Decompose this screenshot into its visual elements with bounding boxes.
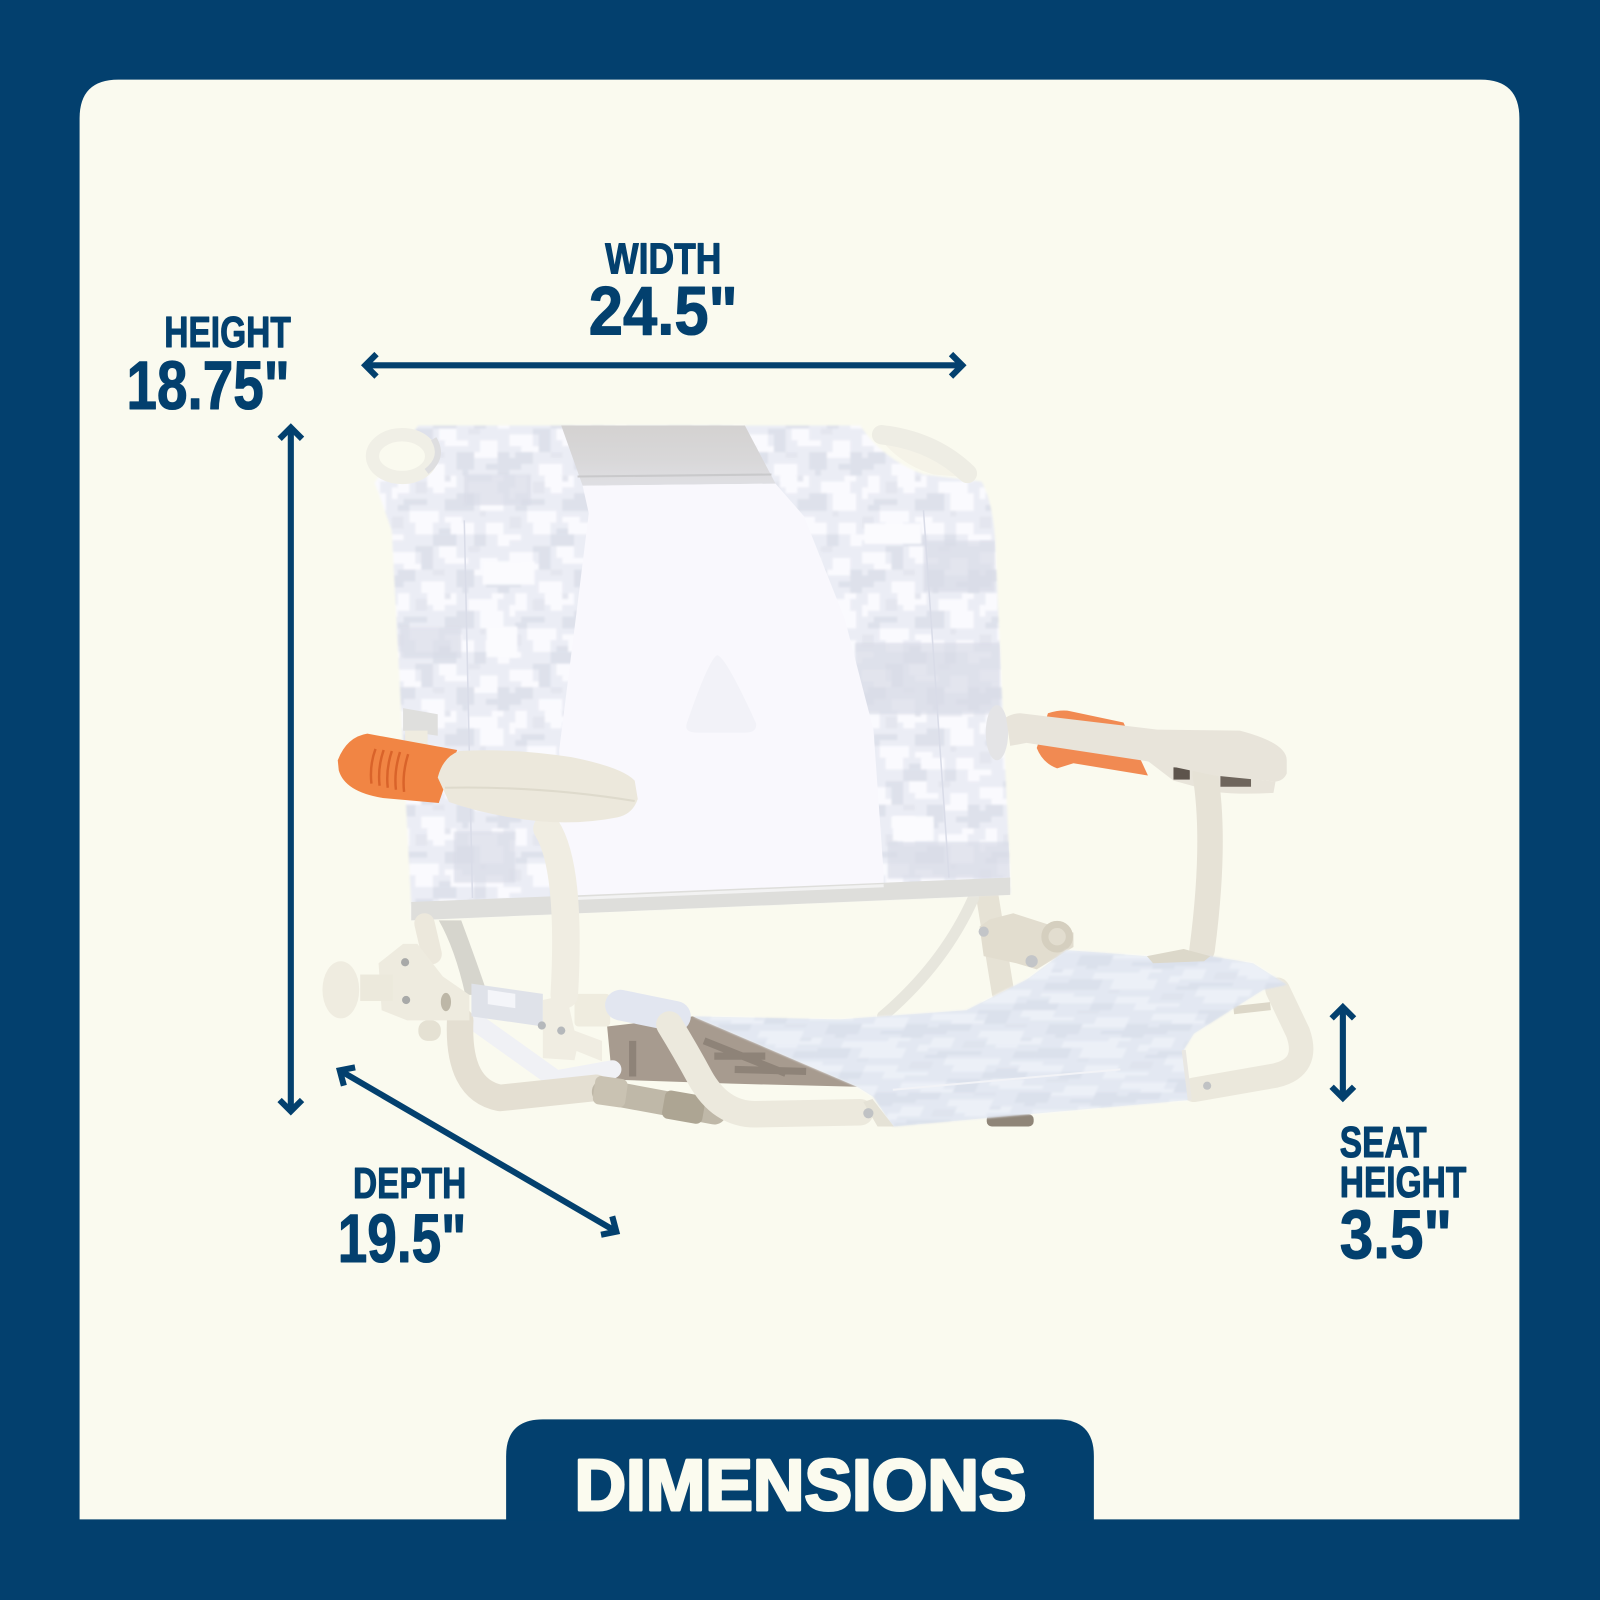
- front seat tube: [669, 1024, 894, 1127]
- height value: 18.75": [127, 348, 290, 424]
- right rear frame and hinge: [883, 893, 1073, 1016]
- title tab: [506, 1419, 1094, 1526]
- lower seat underside: [460, 1016, 857, 1125]
- seat fabric: [693, 949, 1301, 1127]
- depth dimension: [338, 1067, 616, 1277]
- left arm support: [547, 829, 566, 995]
- depth value: 19.5": [338, 1201, 466, 1277]
- seat height label: [1340, 1118, 1466, 1207]
- arrow: seat height: [1332, 1007, 1354, 1098]
- height dimension: [127, 308, 302, 1111]
- depth label: DEPTH: [353, 1159, 466, 1208]
- seat height dimension: [1332, 1007, 1466, 1273]
- arrow: height: [280, 428, 302, 1111]
- width value: 24.5": [589, 274, 738, 350]
- bottom hem: [411, 878, 1010, 920]
- height label: HEIGHT: [164, 308, 291, 357]
- headrest strip: [561, 426, 776, 486]
- chair illustration: [322, 426, 1301, 1127]
- seat height label: HEIGHT: [1340, 1158, 1466, 1207]
- faint logo: [686, 655, 756, 733]
- width dimension: [365, 234, 962, 377]
- arrow: width: [365, 354, 962, 377]
- left seat rail: [471, 984, 676, 1061]
- top handles: [372, 433, 969, 478]
- width label: WIDTH: [605, 234, 721, 283]
- left rear frame and knob: [322, 708, 488, 1041]
- mesh centre panel: [559, 484, 884, 902]
- backrest fabric: [374, 426, 1010, 920]
- right armrest assembly: [986, 705, 1287, 950]
- left armrest with orange grip: [338, 734, 638, 822]
- seat height label: SEAT: [1340, 1118, 1427, 1167]
- seat height value: 3.5": [1340, 1197, 1452, 1273]
- title: DIMENSIONS: [574, 1445, 1027, 1526]
- arrow: depth: [340, 1067, 616, 1235]
